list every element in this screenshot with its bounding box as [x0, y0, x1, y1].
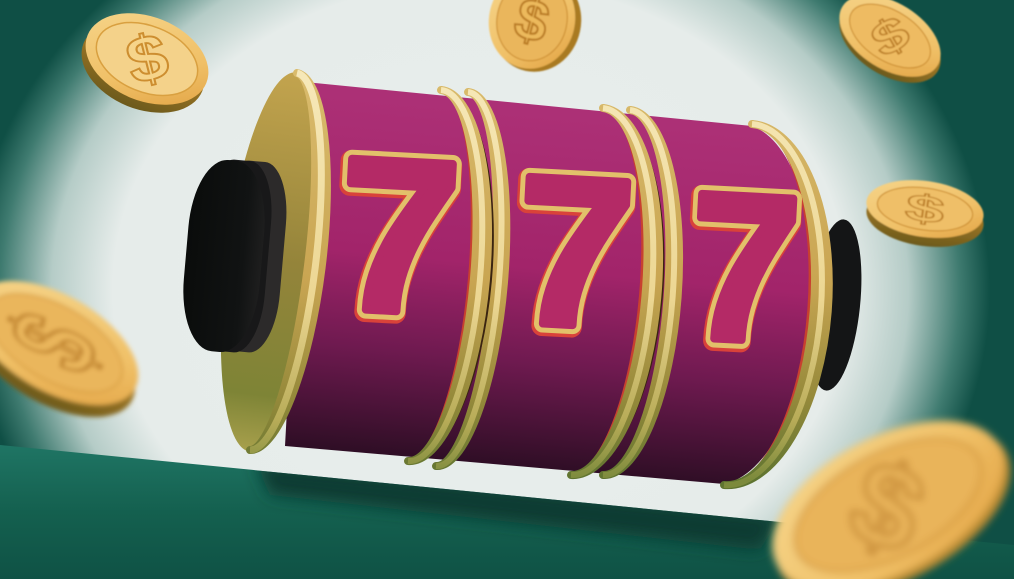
- seven 2: 7: [511, 131, 639, 373]
- seven 2: 7: [510, 133, 638, 375]
- coin bottom right blurred: [745, 386, 1014, 579]
- seven 3: 7: [684, 148, 805, 387]
- left gold disc: [203, 67, 343, 457]
- coin top right: [825, 0, 955, 100]
- gold ring 2: [436, 92, 506, 466]
- gold ring 4: [603, 110, 679, 475]
- coin top left: [68, 0, 222, 130]
- reel body: [285, 82, 813, 484]
- seven 1: 7: [333, 111, 465, 360]
- seven 2: 7: [511, 131, 639, 373]
- seven 1: 7: [333, 111, 465, 360]
- coin bottom right blurred: $: [834, 434, 941, 579]
- left black knob: [178, 157, 291, 355]
- gold ring 1: [408, 90, 492, 461]
- coin left blurred: [0, 255, 159, 443]
- coin right: [863, 173, 987, 254]
- coin top center: [480, 0, 590, 80]
- left gold rim: [250, 73, 327, 450]
- coin top right: $: [862, 5, 918, 68]
- seven 3: 7: [683, 150, 803, 389]
- right black knob: [801, 217, 869, 393]
- gold ring 5: [724, 124, 829, 485]
- seven 1: 7: [331, 113, 464, 362]
- seven 3: 7: [684, 148, 805, 387]
- coin right: $: [903, 185, 947, 232]
- gold ring 3: [571, 108, 663, 475]
- coin top left: $: [119, 19, 175, 99]
- teal table band: [0, 445, 1014, 579]
